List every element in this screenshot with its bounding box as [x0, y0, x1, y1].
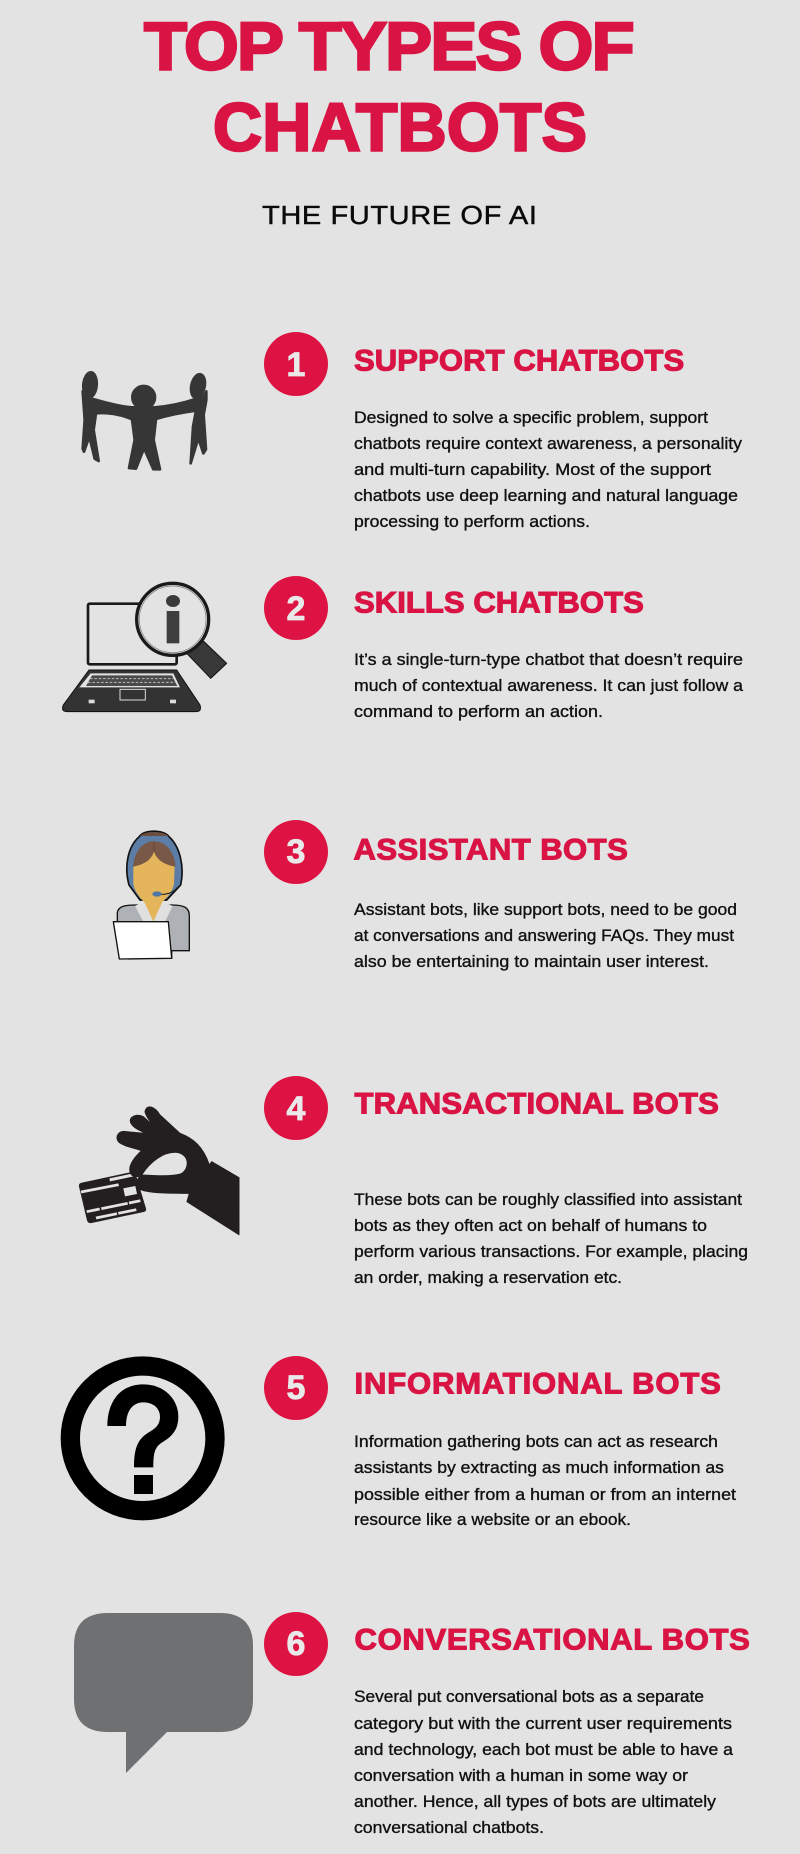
- title: [144, 8, 635, 165]
- heading: INFORMATIONAL BOTS: [354, 1367, 721, 1400]
- title: TOP TYPES OF: [144, 8, 635, 84]
- number badge 1: 1: [287, 346, 305, 384]
- description: Information gathering bots can act as research: [354, 1432, 718, 1451]
- number badge 4: [264, 1076, 328, 1140]
- description: Assistant bots, like support bots, need to be good: [354, 900, 737, 919]
- number badge 1: [264, 332, 328, 396]
- number badge 6: [264, 1612, 328, 1676]
- description: possible either from a human or from an internet: [354, 1485, 736, 1504]
- description: [354, 1687, 734, 1837]
- description: Designed to solve a specific problem, support: [354, 408, 708, 427]
- description: conversational chatbots.: [354, 1818, 544, 1837]
- number badge 2: 2: [287, 590, 305, 628]
- description: and multi-turn capability. Most of the support: [354, 460, 711, 479]
- panel: support chatbots: [82, 332, 743, 531]
- number badge 3: 3: [287, 833, 305, 871]
- description: conversation with a human in some way or: [354, 1766, 688, 1785]
- description: chatbots require context awareness, a personality: [354, 434, 743, 453]
- panel: informational bots: [70, 1356, 736, 1529]
- heading: SKILLS CHATBOTS: [354, 586, 644, 619]
- description: [354, 1432, 736, 1529]
- icon: hand holding credit card: [79, 1107, 239, 1235]
- description: [354, 650, 744, 721]
- description: and technology, each bot must be able to have a: [354, 1740, 734, 1759]
- panel: skills chatbots: [63, 576, 744, 721]
- icon: people holding hands: [82, 372, 207, 469]
- description: another. Hence, all types of bots are ultimately: [354, 1792, 717, 1811]
- subtitle: THE FUTURE OF AI: [262, 200, 537, 230]
- number badge 2: [264, 576, 328, 640]
- title: CHATBOTS: [213, 90, 587, 166]
- panel: conversational bots: [74, 1612, 750, 1837]
- panel: transactional bots: [79, 1076, 748, 1287]
- description: command to perform an action.: [354, 702, 603, 721]
- number badge 5: [264, 1356, 328, 1420]
- description: much of contextual awareness. It can just follow a: [354, 676, 744, 695]
- number badge 3: [264, 820, 328, 884]
- description: chatbots use deep learning and natural language: [354, 486, 738, 505]
- description: an order, making a reservation etc.: [354, 1268, 622, 1287]
- description: [354, 900, 737, 971]
- heading: ASSISTANT BOTS: [354, 833, 628, 866]
- description: perform various transactions. For example, placing: [354, 1242, 748, 1261]
- description: resource like a website or an ebook.: [354, 1510, 631, 1529]
- heading: CONVERSATIONAL BOTS: [354, 1623, 750, 1656]
- description: category but with the current user requirements: [354, 1714, 732, 1733]
- description: assistants by extracting as much information as: [354, 1458, 724, 1477]
- icon: speech bubble: [74, 1613, 253, 1773]
- description: These bots can be roughly classified into assistant: [354, 1190, 742, 1209]
- description: Several put conversational bots as a separate: [354, 1687, 704, 1706]
- number badge 6: 6: [287, 1625, 305, 1663]
- number badge 5: 5: [287, 1369, 305, 1407]
- description: [354, 408, 743, 531]
- description: at conversations and answering FAQs. They must: [354, 926, 734, 945]
- icon: question mark in circle: [70, 1366, 215, 1511]
- number badge 4: 4: [287, 1090, 306, 1128]
- description: It’s a single-turn-type chatbot that doesn’t require: [354, 650, 743, 669]
- description: [354, 1190, 748, 1287]
- description: also be entertaining to maintain user interest.: [354, 952, 709, 971]
- panel: assistant bots: [113, 820, 737, 971]
- icon: laptop with info magnifier: [63, 583, 227, 712]
- description: processing to perform actions.: [354, 512, 590, 531]
- icon: support agent with headset: [113, 831, 189, 959]
- description: bots as they often act on behalf of humans to: [354, 1216, 707, 1235]
- heading: SUPPORT CHATBOTS: [354, 344, 684, 377]
- heading: TRANSACTIONAL BOTS: [354, 1087, 719, 1120]
